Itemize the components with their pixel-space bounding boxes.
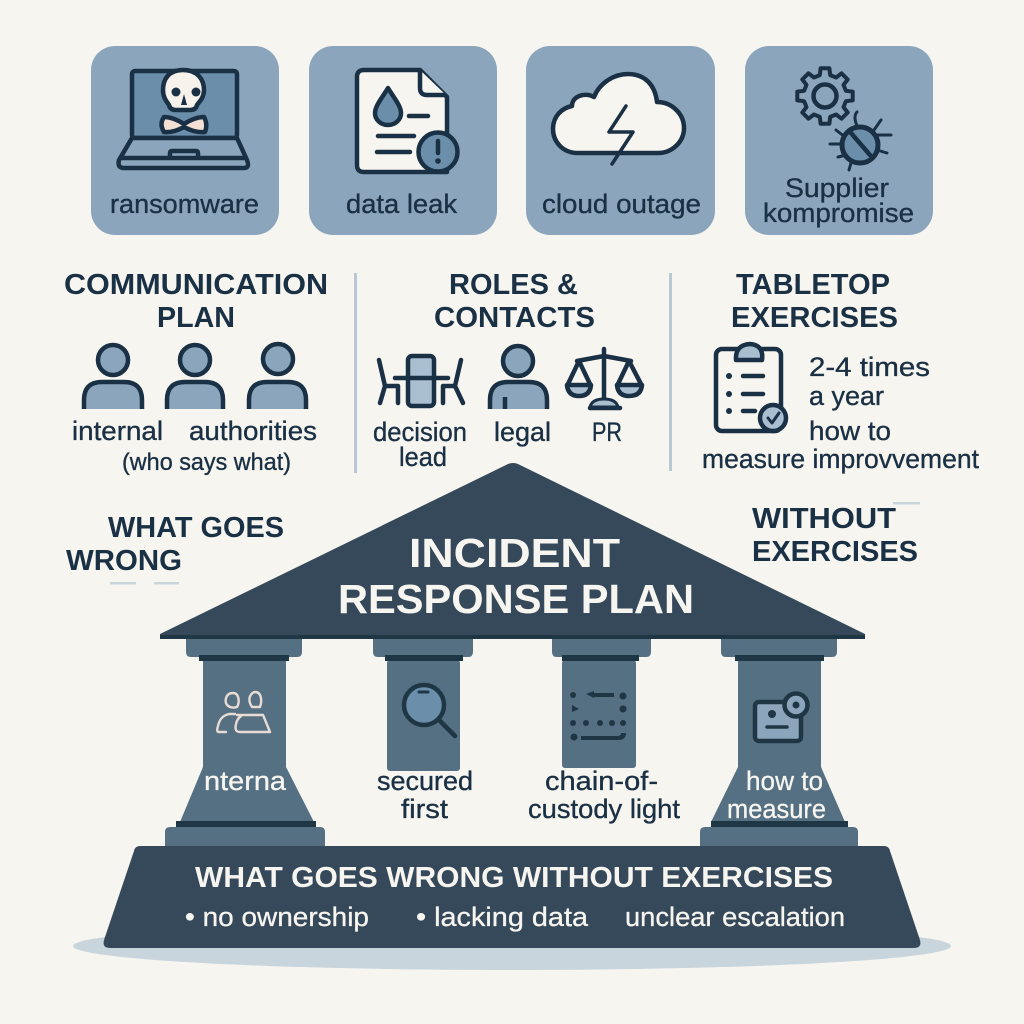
icon: two people outline — [217, 692, 270, 732]
icon: table and chairs — [379, 356, 463, 406]
column 1: internal: nterna — [204, 766, 286, 796]
icon: document with drop and alert — [357, 70, 458, 172]
labels: decision lead, legal, PR: PR — [592, 417, 622, 447]
base: what goes wrong without exercises: • no ownership — [185, 902, 369, 932]
labels: decision lead, legal, PR: lead — [399, 442, 447, 472]
heading: roles and contacts — [434, 269, 595, 334]
column 2: secured first: secured — [377, 766, 473, 796]
column 3: chain of custody — [528, 639, 681, 824]
roof: incident response plan: INCIDENT — [409, 530, 620, 576]
labels: internal, authorities: authorities — [189, 416, 317, 446]
column 3: chain of custody: chain-of- — [545, 766, 658, 796]
labels: internal, authorities: internal — [72, 416, 163, 446]
labels: internal, authorities — [72, 416, 317, 476]
divider left — [354, 273, 357, 473]
panel: roles and contacts — [373, 269, 642, 472]
icon: clipboard with check — [716, 344, 786, 431]
icon: cloud with lightning bolt — [553, 74, 684, 164]
heading: without exercises — [752, 502, 920, 568]
card: cloud outage — [526, 46, 715, 235]
text: frequency and measure: a year — [809, 381, 884, 411]
column 4: how to measure: how to — [746, 766, 823, 796]
heading: without exercises: WITHOUT — [752, 503, 896, 535]
heading: roles and contacts: CONTACTS — [434, 302, 595, 334]
icon: person legal — [490, 346, 547, 409]
icon: measure card — [755, 694, 808, 741]
card: supplier kompromise: Supplier — [785, 173, 889, 203]
heading: communication plan: COMMUNICATION — [64, 269, 328, 301]
base: what goes wrong without exercises: unclear escalation — [625, 902, 845, 932]
heading: what goes wrong: WRONG — [66, 545, 182, 577]
heading: tabletop exercises: EXERCISES — [731, 302, 898, 334]
panel: tabletop exercises — [702, 269, 980, 474]
icon: three people — [84, 344, 306, 409]
labels: internal, authorities: (who says what) — [122, 449, 291, 476]
heading: without exercises: EXERCISES — [752, 536, 918, 568]
card: data leak — [309, 46, 497, 235]
card: data leak: data leak — [346, 189, 458, 219]
roof: incident response plan: RESPONSE PLAN — [338, 576, 694, 622]
icon: scales — [567, 349, 642, 408]
column 1: internal — [165, 639, 325, 846]
divider right — [669, 273, 672, 471]
card: ransomware: ransomware — [110, 189, 259, 219]
card: supplier kompromise: kompromise — [763, 198, 914, 228]
card: cloud outage: cloud outage — [542, 189, 701, 219]
heading: tabletop exercises — [731, 269, 898, 334]
text: frequency and measure — [702, 352, 980, 474]
column 2: secured first: first — [401, 794, 449, 824]
roof: incident response plan — [160, 463, 865, 639]
heading: tabletop exercises: TABLETOP — [736, 269, 890, 301]
base: what goes wrong without exercises — [104, 846, 920, 948]
labels: decision lead, legal, PR: decision — [373, 417, 467, 447]
heading: roles and contacts: ROLES & — [449, 269, 578, 301]
heading: what goes wrong — [66, 512, 284, 584]
labels: decision lead, legal, PR: legal — [494, 417, 551, 447]
icon: dotted chain — [570, 691, 626, 740]
icon: magnifier — [404, 685, 455, 736]
card: ransomware — [91, 46, 279, 235]
base: what goes wrong without exercises: • lacking data — [416, 902, 588, 932]
panel: threat cards — [91, 46, 933, 235]
column 3: chain of custody: custody light — [528, 794, 681, 824]
icon: gear — [797, 68, 853, 124]
base: what goes wrong without exercises: WHAT GOES WRONG WITHOUT EXERCISES — [195, 862, 833, 894]
card: supplier kompromise — [745, 46, 933, 235]
heading: communication plan: PLAN — [157, 302, 235, 334]
heading: communication plan — [64, 269, 328, 334]
labels: decision lead, legal, PR — [373, 417, 622, 472]
panel: communication plan — [64, 269, 328, 476]
heading: what goes wrong: WHAT GOES — [108, 512, 284, 544]
text: frequency and measure: how to — [809, 416, 891, 446]
column 4: how to measure — [700, 639, 858, 846]
icon: laptop with skull — [119, 70, 248, 168]
ground shadow — [73, 922, 951, 970]
column 4: how to measure: measure — [727, 794, 826, 824]
icon: bug — [830, 112, 891, 170]
column 2: secured first — [373, 639, 473, 824]
text: frequency and measure: measure improvvement — [702, 444, 980, 474]
text: frequency and measure: 2-4 times — [809, 352, 930, 382]
